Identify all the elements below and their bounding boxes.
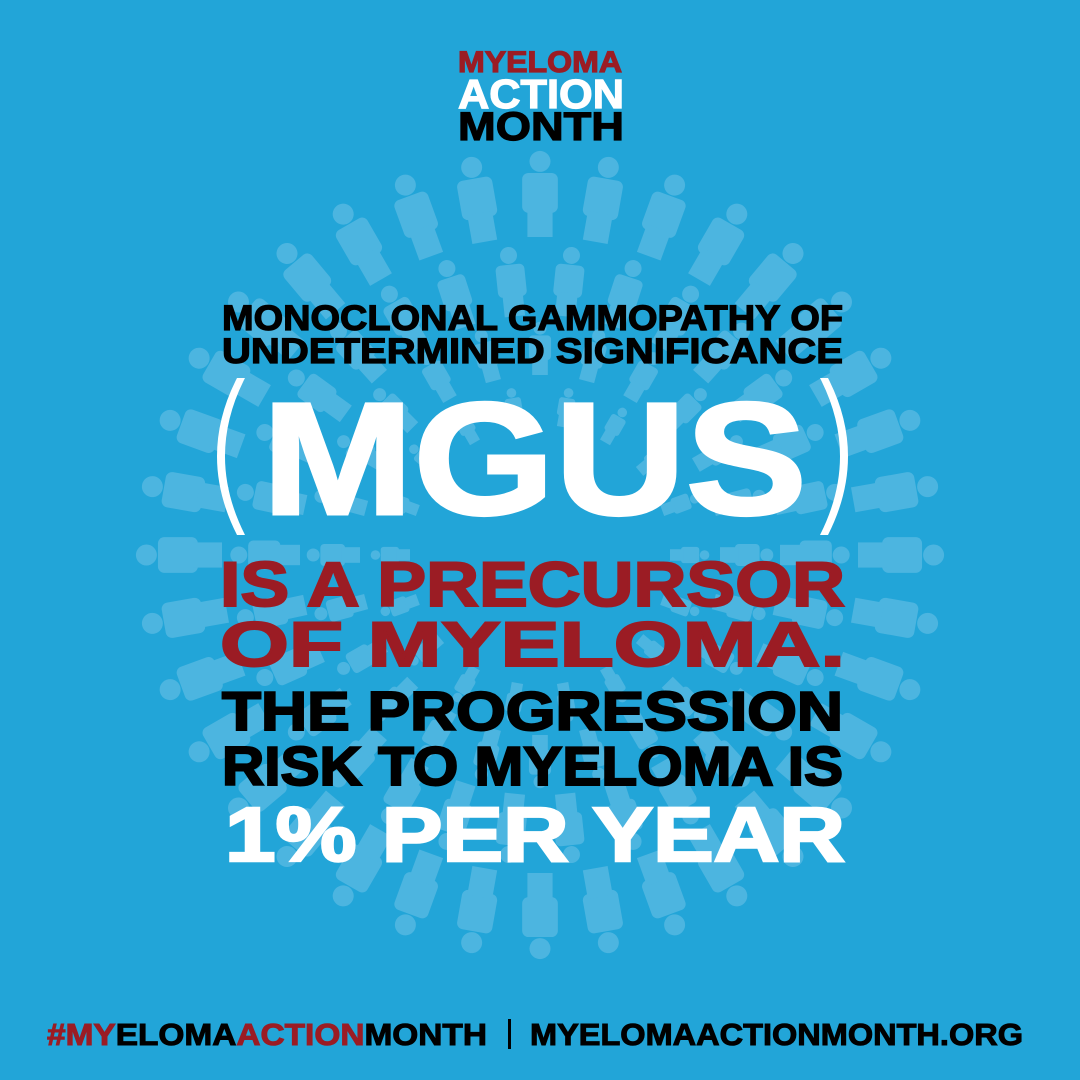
heading: full name: MONOCLONAL GAMMOPATHY OF [222, 299, 843, 338]
footer: hashtag: #MYELOMA ACTION MONTH [47, 1017, 487, 1052]
statement: precursor: OF MYELOMA. [220, 610, 845, 680]
logo: Myeloma Action Month: MYELOMA [458, 46, 622, 79]
heading: full name [222, 299, 843, 371]
heading: (MGUS): MGUS [262, 369, 807, 548]
logo: Myeloma Action Month [458, 46, 624, 149]
statement: progression risk [222, 680, 843, 797]
statement: progression risk: THE PROGRESSION [222, 680, 843, 742]
logo: Myeloma Action Month: ACTION [458, 71, 624, 117]
statistic: 1% per year: 1% PER YEAR [225, 792, 845, 878]
statement: precursor: IS A PRECURSOR [220, 550, 845, 620]
footer: website: MYELOMAACTIONMONTH.ORG [530, 1017, 1023, 1052]
statement: precursor [220, 550, 845, 680]
footer divider [508, 1019, 511, 1049]
logo: Myeloma Action Month: MONTH [458, 105, 624, 149]
heading: full name: UNDETERMINED SIGNIFICANCE [222, 332, 843, 371]
statement: progression risk: RISK TO MYELOMA IS [222, 735, 843, 797]
